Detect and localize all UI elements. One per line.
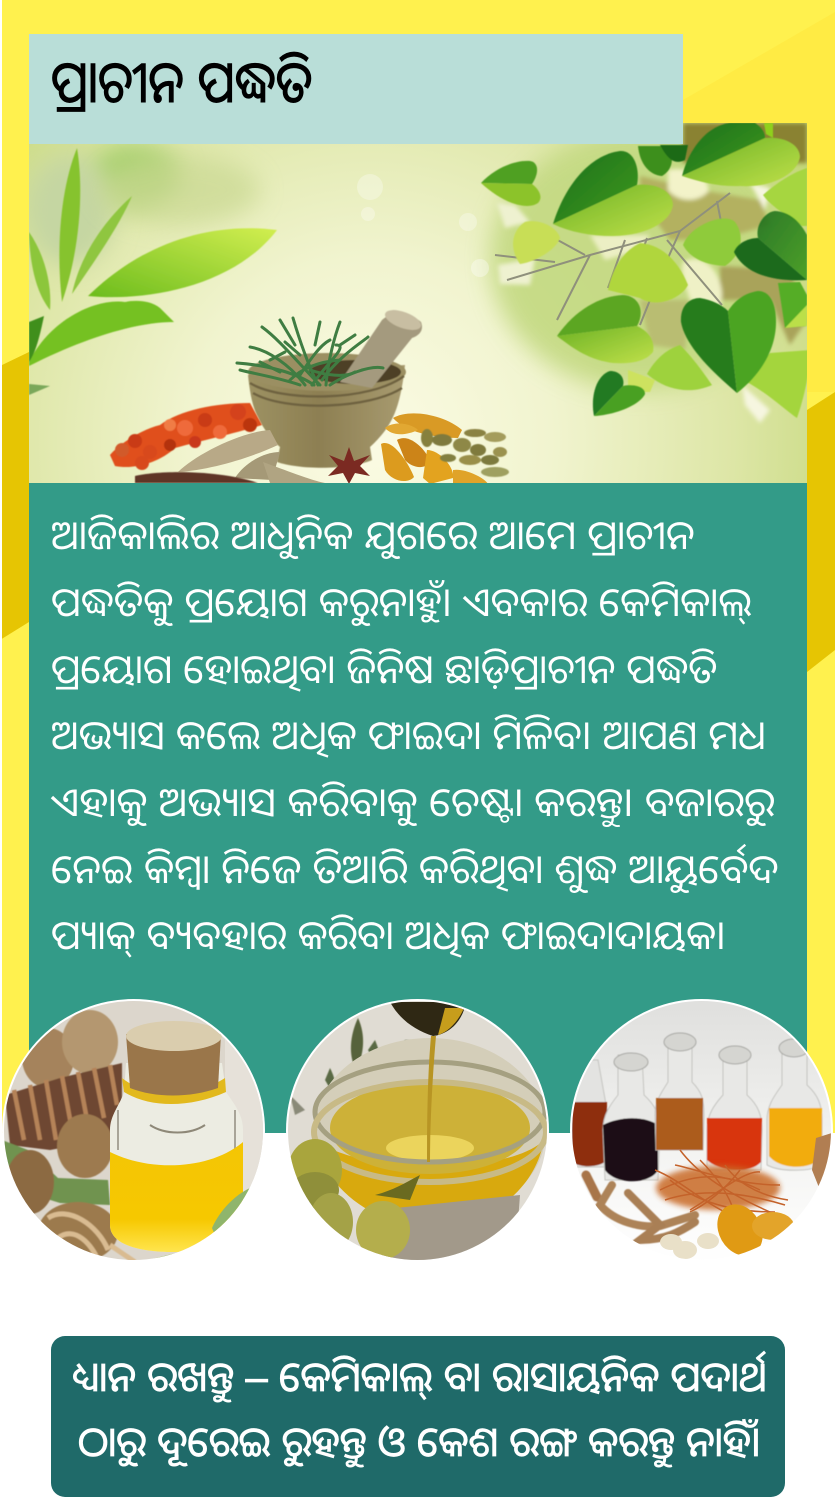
body text line 7: ପ୍ୟାକ୍ ବ୍ୟବହାର କରିବା ଅଧିକ ଫାଇଦାଦାୟକ। xyxy=(51,913,726,958)
left plant leaves xyxy=(29,148,277,395)
body text line 3: ପ୍ରୟୋଗ ହୋଇଥିବା ଜିନିଷ ଛାଡ଼ିପ୍ରାଚୀନ ପଦ୍ଧତି xyxy=(51,647,717,692)
photo: oil bottle with walnuts xyxy=(2,999,266,1263)
photo: oil pouring into glass bowl xyxy=(286,999,550,1263)
panel: body text background xyxy=(29,483,807,1133)
body text line 1: ଆଜିକାଲିର ଆଧୁନିକ ଯୁଗରେ ଆମେ ପ୍ରାଚୀନ xyxy=(51,513,695,558)
pestle and mortar xyxy=(248,306,424,468)
spices: chilli pile, bay leaves, star anise, turmeric and cardamom xyxy=(110,403,509,484)
pale leaves xyxy=(513,168,810,418)
title: ପ୍ରାଚୀନ ପଦ୍ଧତି xyxy=(51,50,312,115)
body text line 5: ଏହାକୁ ଅଭ୍ୟାସ କରିବାକୁ ଚେଷ୍ଟା କରନ୍ତୁ। ବଜାରରୁ xyxy=(51,780,775,825)
body text line 4: ଅଭ୍ୟାସ କଲେ ଅଧିକ ଫାଇଦା ମିଳିବ। ଆପଣ ମଧ xyxy=(51,713,766,758)
panel: warning note xyxy=(51,1336,785,1497)
rosemary herb xyxy=(237,318,383,385)
warning text line 2: ଠାରୁ ଦୂରେଇ ରୁହନ୍ତୁ ଓ କେଶ ରଙ୍ଗ କରନ୍ତୁ ନାହିଁ। xyxy=(78,1419,761,1465)
hero image: herbs, mortar and leaves xyxy=(25,123,810,484)
heart leaves xyxy=(481,123,807,416)
body text line 2: ପଦ୍ଧତିକୁ ପ୍ରୟୋଗ କରୁନାହୁଁ। ଏବକାର କେମିକାଲ୍ xyxy=(51,580,752,625)
branches xyxy=(495,193,730,325)
bark and pale background shapes xyxy=(497,123,807,423)
panel: heading background xyxy=(29,34,683,144)
body text line 6: ନେଇ କିମ୍ବା ନିଜେ ତିଆରି କରିଥିବା ଶୁଦ୍ଧ ଆୟୁର୍ବେଦ xyxy=(51,847,779,892)
warning text line 1: ଧ୍ୟାନ ରଖନ୍ତୁ – କେମିକାଲ୍ ବା ରାସାୟନିକ ପଦାର୍ଥ xyxy=(72,1354,767,1400)
photo: ayurvedic oil bottles with herbs xyxy=(570,999,835,1264)
